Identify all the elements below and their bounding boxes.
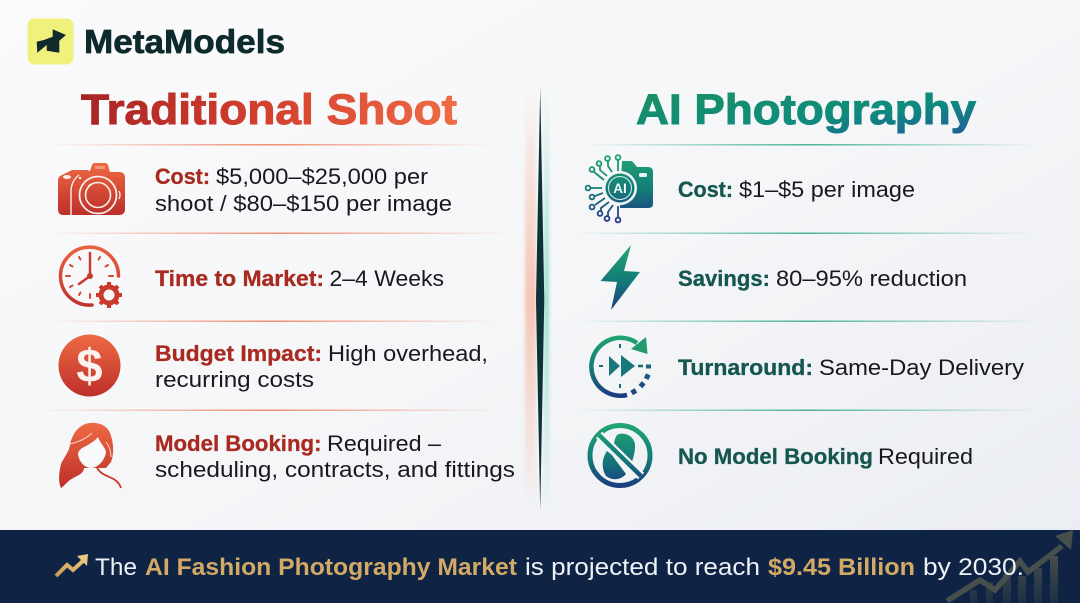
savings text: 80–95% reduction xyxy=(776,266,967,291)
panel: traditional shoot xyxy=(36,144,515,488)
icon: AI camera: AI xyxy=(613,181,627,196)
icon: AI camera xyxy=(586,155,653,222)
cost text: Cost: xyxy=(155,164,210,189)
market projection statement: is projected to reach xyxy=(525,554,760,581)
market projection statement: AI Fashion Photography Market xyxy=(145,554,517,581)
model booking text: scheduling, contracts, and fittings xyxy=(155,457,515,482)
turnaround text: Same-Day Delivery xyxy=(819,355,1025,380)
model booking text: Required – xyxy=(327,431,441,456)
icon: turnaround clock xyxy=(591,337,651,396)
savings text xyxy=(678,266,967,291)
icon: dollar coin: $ xyxy=(76,339,103,392)
icon: no model xyxy=(590,426,650,486)
budget impact text: High overhead, xyxy=(328,341,488,366)
no model booking text xyxy=(678,444,973,469)
cost text: Cost: xyxy=(678,177,733,202)
cost text: $5,000–$25,000 per xyxy=(216,164,429,189)
decorative rising chart xyxy=(947,530,1073,603)
market projection statement: by 2030. xyxy=(923,554,1024,581)
icon: camera xyxy=(58,163,125,215)
icon: clock with gear xyxy=(61,247,122,308)
heading: Traditional Shoot: Traditional Shoot xyxy=(81,86,457,134)
icon: dollar coin xyxy=(58,334,120,396)
market projection statement xyxy=(95,554,1024,581)
budget impact text xyxy=(155,341,488,392)
icon: gold trend arrow xyxy=(56,554,88,576)
turnaround text: Turnaround: xyxy=(678,355,813,380)
budget impact text: recurring costs xyxy=(155,367,314,392)
market projection statement: The xyxy=(95,554,137,581)
panel: ai photography xyxy=(572,144,1039,486)
cost text: shoot / $80–$150 per image xyxy=(155,191,452,216)
brand name: MetaModels xyxy=(84,23,285,60)
cost text xyxy=(155,164,452,216)
center divider xyxy=(525,88,549,510)
savings text: Savings: xyxy=(678,266,770,291)
budget impact text: Budget Impact: xyxy=(155,341,322,366)
cost text: $1–$5 per image xyxy=(739,177,915,202)
icon: logo mark xyxy=(28,18,74,64)
footer banner xyxy=(0,530,1080,603)
turnaround text xyxy=(678,355,1025,380)
model booking text xyxy=(155,431,515,482)
time to market text: 2–4 Weeks xyxy=(330,266,444,291)
market projection statement: $9.45 Billion xyxy=(768,554,915,581)
time to market text: Time to Market: xyxy=(155,266,324,291)
icon: woman with long hair xyxy=(59,423,121,488)
no model booking text: No Model Booking xyxy=(678,444,873,469)
no model booking text: Required xyxy=(878,444,973,469)
icon: lightning bolt xyxy=(600,245,640,310)
heading: AI Photography: AI Photography xyxy=(636,86,976,134)
logo xyxy=(28,18,285,64)
time to market text xyxy=(155,266,444,291)
model booking text: Model Booking: xyxy=(155,431,322,456)
